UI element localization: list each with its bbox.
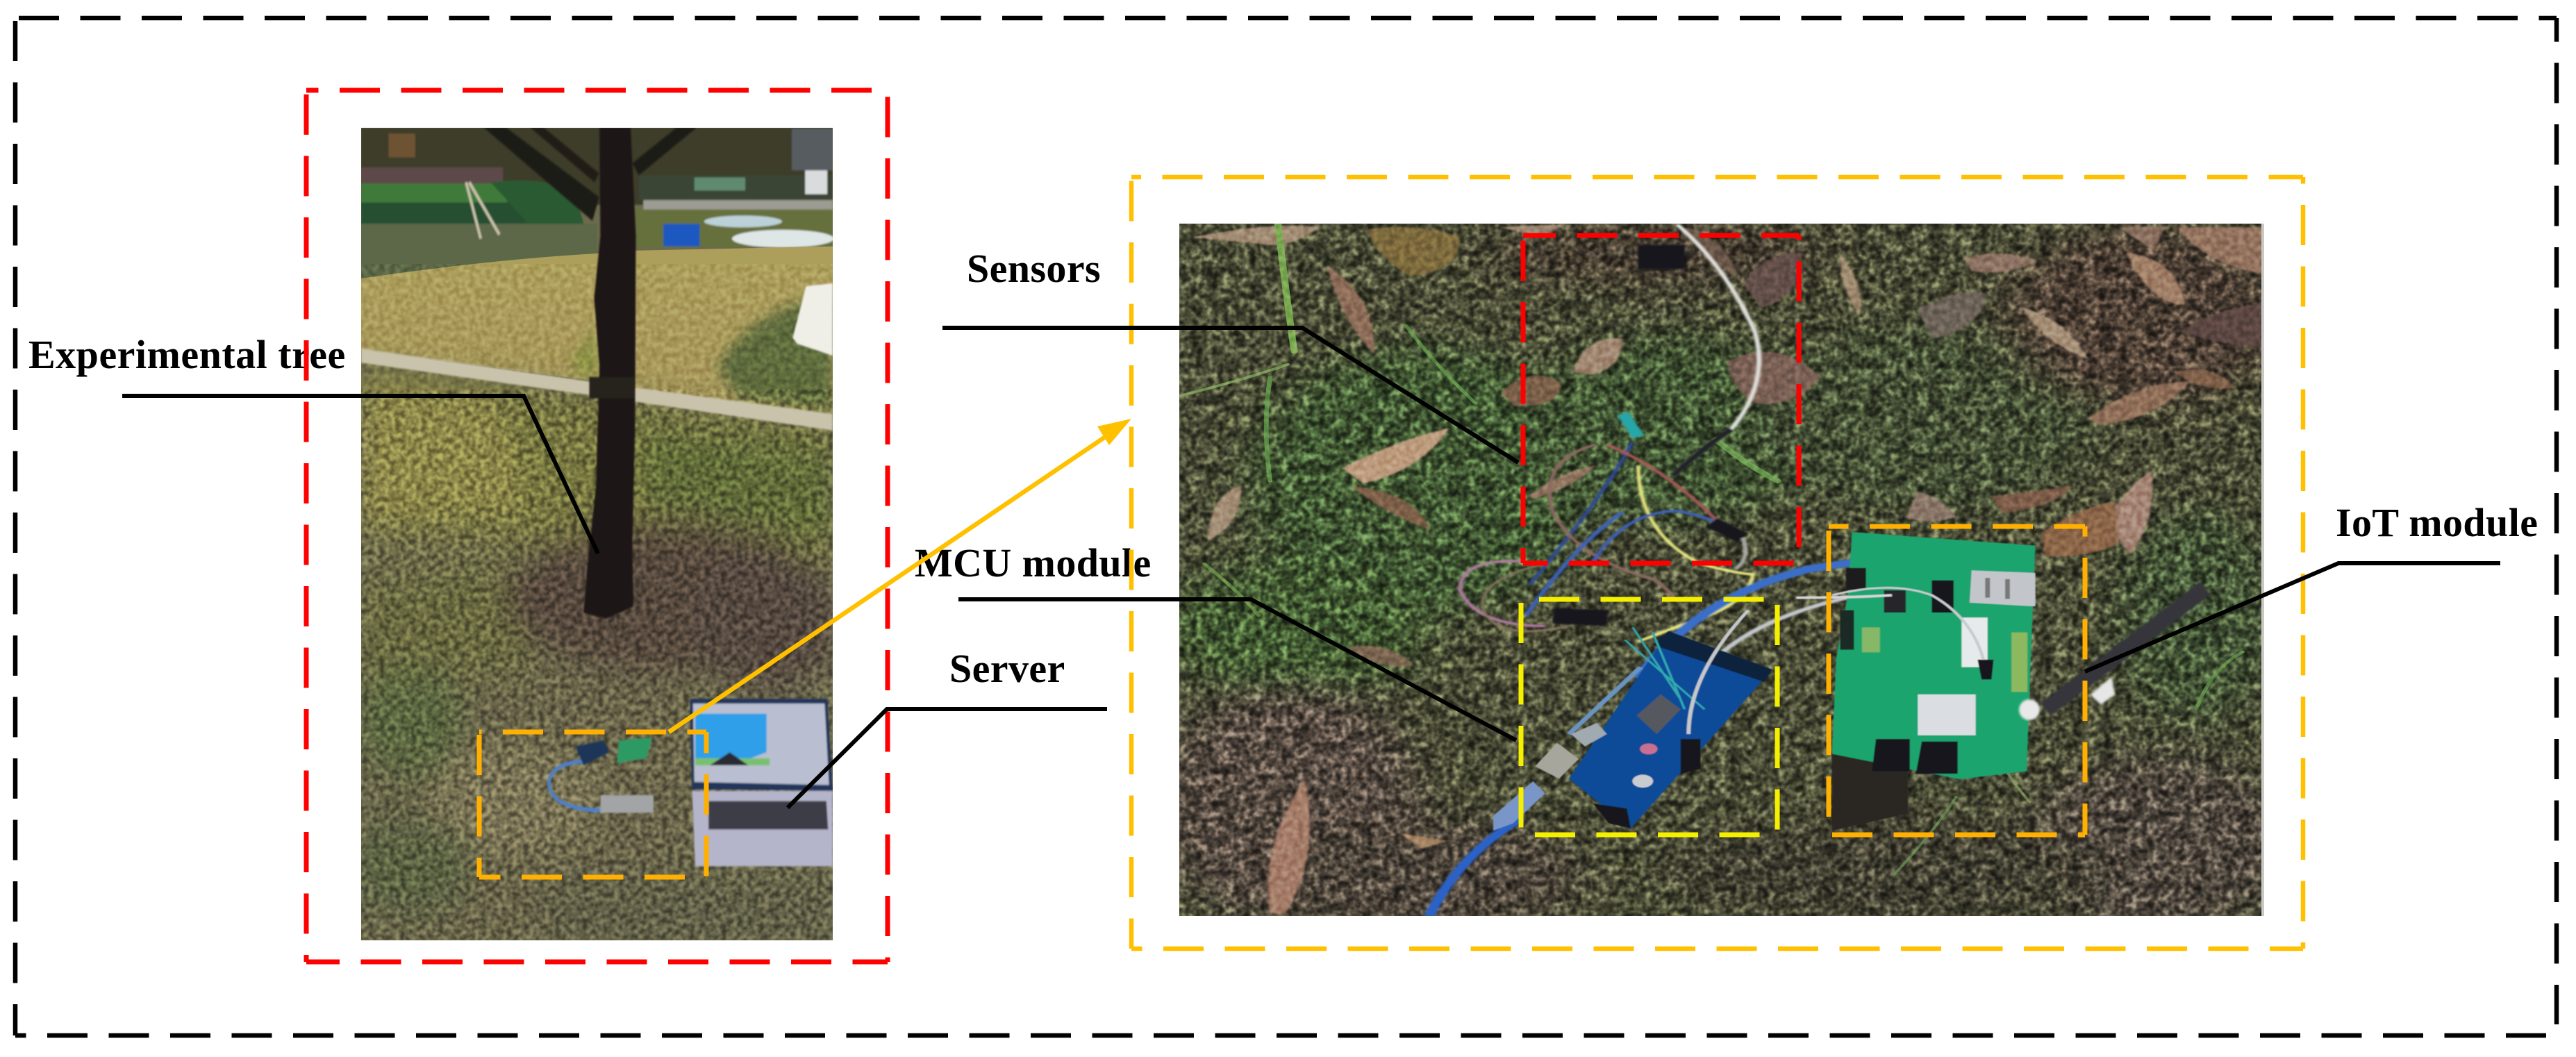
photo: sensor and module close-up — [1158, 222, 2289, 932]
tree trunk — [484, 128, 697, 619]
panel border: yellow dashed frame around close-up photo — [1131, 177, 2303, 949]
label: MCU module: MCU module — [915, 540, 1152, 585]
antenna — [2019, 588, 2205, 720]
highlight: sensors box — [1523, 235, 1799, 563]
leader line: IoT module — [2085, 563, 2500, 672]
grass texture — [361, 389, 833, 940]
background scenery — [361, 128, 834, 281]
label: Experimental tree: Experimental tree — [28, 332, 346, 377]
leader line: Experimental tree — [122, 396, 598, 554]
ground colour patches — [1158, 222, 2289, 932]
sensors and wires — [1429, 224, 1987, 916]
laptop — [690, 699, 833, 866]
highlight: IoT module box — [1829, 526, 2085, 835]
power bank and boards — [549, 738, 654, 813]
long grass blades — [1181, 224, 2243, 874]
photo: experimental tree and setup — [349, 128, 840, 948]
sensor module — [1638, 244, 1685, 269]
lower grass — [349, 367, 840, 948]
leaf texture — [1179, 224, 2264, 916]
leader line: Server — [788, 709, 1107, 808]
lawn shadow — [717, 301, 833, 414]
photo edge — [2261, 224, 2264, 916]
highlight: MCU module box — [1521, 599, 1777, 835]
label: Server: Server — [949, 646, 1065, 691]
grass texture — [1179, 224, 2264, 916]
leader line: MCU module — [958, 599, 1516, 740]
fallen leaves — [1193, 224, 2265, 913]
label: Sensors: Sensors — [967, 246, 1101, 291]
arrow: devices box to close-up — [669, 419, 1131, 732]
highlight: devices box in tree photo — [479, 732, 706, 877]
IoT board shadow — [1832, 754, 1908, 831]
IoT board — [1832, 532, 2036, 779]
label: IoT module: IoT module — [2336, 500, 2538, 545]
concrete path — [361, 349, 833, 431]
white slabs — [792, 283, 833, 356]
panel border: red dashed frame around tree photo — [306, 90, 888, 962]
sunlit lawn — [361, 247, 833, 414]
MCU board — [1569, 631, 1772, 829]
leader line: Sensors — [942, 328, 1518, 463]
